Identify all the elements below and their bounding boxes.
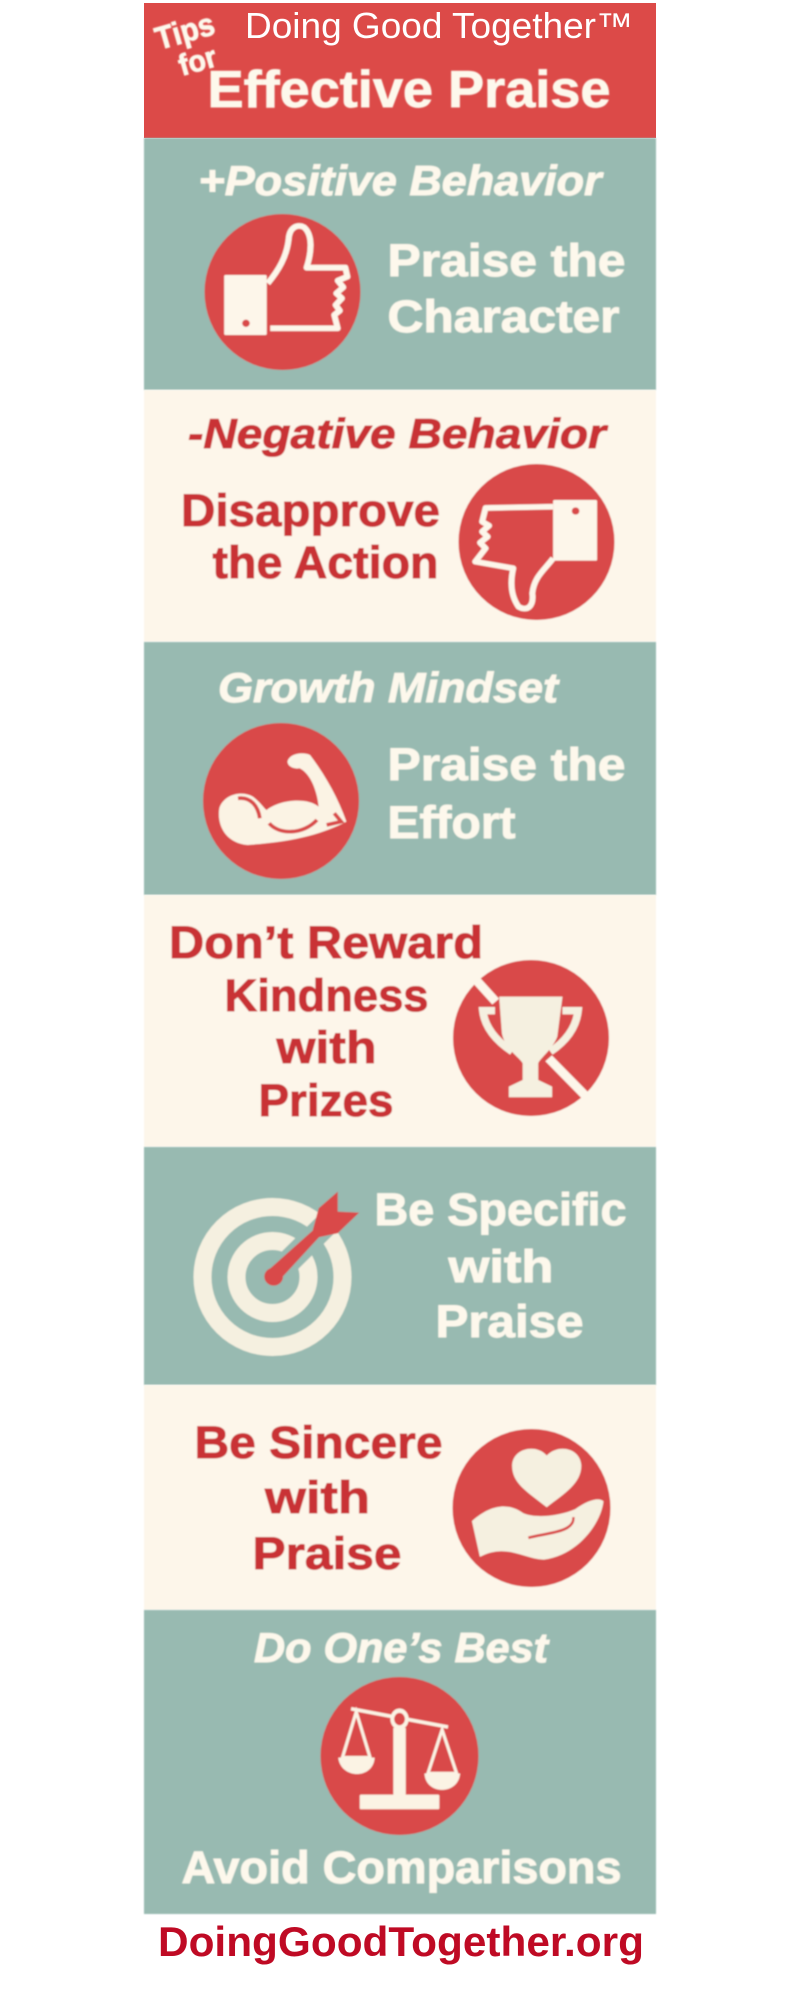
text: be sincere with praise: Be Sincere [194,1417,442,1468]
icon: thumbs up [204,214,360,370]
heading: tips for [151,6,221,83]
icon: target with arrow [202,1192,359,1347]
heading: tips for: Tips [151,6,219,57]
text: be specific with praise: with [447,1241,554,1292]
brand: doing good together: Doing Good Together™ [245,5,633,46]
heading: do one's best: Do One’s Best [254,1624,550,1671]
text: praise the effort: Effort [388,797,516,848]
text: don't reward kindness with prizes [169,917,483,1126]
text: be specific with praise [374,1184,626,1347]
icon: thumbs down [458,464,614,620]
text: be specific with praise: Praise [436,1296,584,1347]
heading: growth mindset: Growth Mindset [218,664,560,711]
title: effective praise: Effective Praise [208,61,610,119]
icon: crossed-out trophy [453,960,609,1116]
text: be specific with praise: Be Specific [374,1184,626,1235]
panel: negative behavior [144,390,656,642]
text: don't reward kindness with prizes: Prizes [258,1075,394,1126]
heading: negative behavior: -Negative Behavior [188,410,609,457]
icon: balance scale [320,1677,478,1835]
text: don't reward kindness with prizes: Kindness [224,970,428,1021]
text: be sincere with praise [194,1417,442,1579]
heading: positive behavior: +Positive Behavior [198,157,604,204]
text: disapprove the action [181,485,440,588]
text: praise the effort: Praise the [388,739,626,790]
text: praise the character: Character [388,291,620,342]
text: avoid comparisons: Avoid Comparisons [182,1842,622,1893]
heading: tips for: for [175,40,221,83]
footer: website: DoingGoodTogether.org [158,1918,644,1965]
text: be sincere with praise: Praise [252,1528,402,1579]
text: be sincere with praise: with [264,1472,370,1523]
panel: header [144,3,656,138]
text: disapprove the action: Disapprove [181,485,440,536]
panel: growth mindset [144,642,656,895]
icon: heart in hand [452,1429,610,1587]
panel: do one's best [144,1610,656,1914]
text: praise the character [388,235,626,342]
panel: positive behavior [144,138,656,390]
text: don't reward kindness with prizes: Don’t Reward [169,917,483,968]
text: praise the character: Praise the [388,235,626,286]
panel: don't reward kindness [144,895,656,1147]
icon: flexed arm [203,723,359,879]
panel: be sincere [144,1385,656,1610]
text: don't reward kindness with prizes: with [275,1022,376,1073]
text: praise the effort [388,739,626,848]
text: disapprove the action: the Action [212,537,438,588]
panel: be specific [144,1147,656,1385]
